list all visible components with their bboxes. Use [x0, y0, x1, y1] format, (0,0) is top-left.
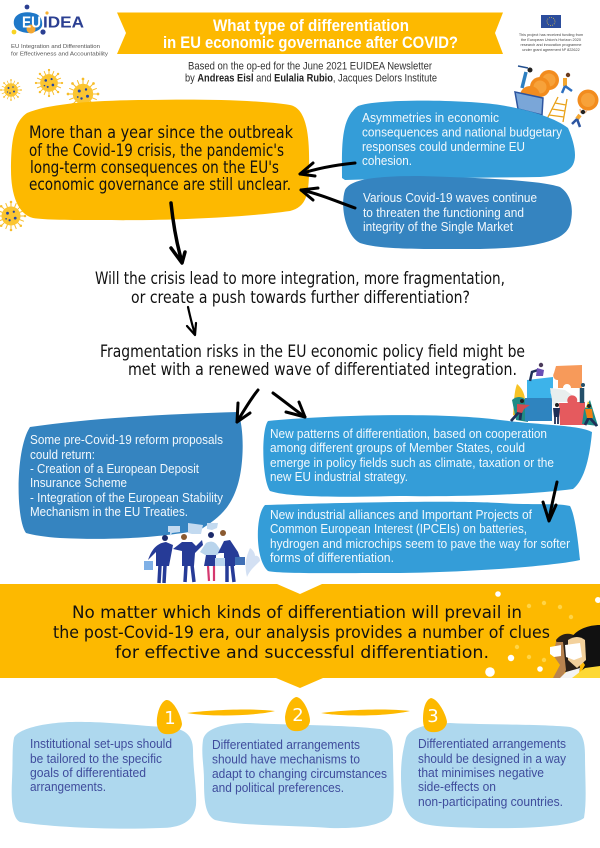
panel: recommendation 3: should be designed in a way [418, 751, 566, 766]
panel: asymmetries [342, 101, 575, 180]
panel: recommendation 1 [12, 722, 196, 829]
panel: new patterns [263, 415, 592, 497]
panel: pre-Covid proposals: - Integration of the European Stability [30, 490, 223, 505]
illustration: coins, basket and ladder [515, 66, 598, 127]
panel: recommendation 1: arrangements. [30, 779, 106, 794]
logo: EUIDEA: EU Integration and Differentiation [11, 44, 100, 50]
illustration: puzzle pieces [511, 363, 598, 426]
panel: recommendation 3: that minimises negative [418, 765, 544, 780]
number 3 badge: 3 [427, 706, 439, 727]
fragmentation text: met with a renewed wave of differentiated integration. [128, 360, 517, 379]
panel: recommendation 3: side-effects on [418, 779, 496, 794]
illustration: business people [144, 523, 260, 583]
fragmentation text [100, 342, 525, 379]
number 3 badge [423, 698, 447, 732]
panel: pre-Covid proposals: Some pre-Covid-19 reform proposals [30, 432, 223, 447]
question text: Will the crisis lead to more integration, more fragmentation, [95, 269, 505, 288]
number 2 badge [285, 697, 310, 731]
panel: recommendation 3 [401, 723, 586, 828]
EU funding notice: This project has received funding from [519, 33, 583, 37]
logo: EUIDEA: IDEA [43, 14, 84, 32]
EU funding notice: under grant agreement Nº 822622 [522, 48, 580, 52]
panel: asymmetries: consequences and national budgetary [362, 124, 562, 140]
arrow: question to fragmentation [187, 307, 196, 335]
logo: EUIDEA [11, 5, 108, 58]
logo: EUIDEA: EU [22, 14, 41, 32]
panel: industrial alliances: Common European Interest (IPCEIs) on batteries, [270, 521, 527, 536]
panel: recommendation 2: Differentiated arrangements [212, 737, 360, 752]
arrow: intro to question [171, 203, 185, 263]
panel: new patterns: among different groups of Member States, could [270, 440, 525, 455]
number 1 badge: 1 [164, 708, 176, 729]
title banner: in EU economic governance after COVID? [163, 33, 458, 52]
panel: industrial alliances [258, 502, 580, 573]
panel: yellow intro blob: long-term consequences on the EU's [30, 158, 279, 177]
panel: industrial alliances: New industrial alliances and Important Projects of [270, 507, 532, 522]
panel: new patterns: emerge in policy fields such as climate, taxation or the [270, 455, 554, 470]
title banner: What type of differentiation [213, 16, 409, 35]
panel: industrial alliances: forms of differentiation. [270, 550, 394, 565]
EU funding notice: the European Union's Horizon 2020 [521, 38, 581, 42]
arrow: new patterns to alliances [543, 482, 557, 521]
virus icons [0, 69, 119, 231]
panel: recommendation 2 [202, 723, 394, 828]
panel: covid waves: to threaten the functioning and [363, 205, 524, 220]
panel: covid waves [343, 176, 572, 249]
number 2 badge: 2 [292, 705, 304, 726]
panel: recommendation 1: Institutional set-ups should [30, 736, 172, 751]
arrow: asymmetries to intro [300, 163, 355, 176]
panel: new patterns: new EU industrial strategy. [270, 469, 408, 484]
panel: recommendation 1: goals of differentiated [30, 765, 146, 780]
panel: recommendation 2: and political preferences. [212, 780, 344, 795]
panel: recommendation 2: adapt to changing circumstances [212, 766, 387, 781]
connector line [187, 710, 275, 715]
EU funding notice: research and innovation programme [520, 43, 582, 47]
panel: asymmetries: Asymmetries in economic [362, 110, 499, 125]
panel: pre-Covid proposals: - Creation of a European Deposit [30, 461, 199, 476]
panel: covid waves: Various Covid-19 waves continue [363, 190, 537, 205]
fragmentation text: Fragmentation risks in the EU economic policy field might be [100, 342, 525, 361]
subtitle [185, 60, 437, 84]
panel: yellow conclusion band: for effective and successful differentiation. [115, 643, 489, 662]
panel: yellow intro blob: economic governance are still unclear. [29, 175, 291, 194]
panel: new patterns: New patterns of differentiation, based on cooperation [270, 426, 547, 441]
number 1 badge [157, 700, 182, 734]
panel: yellow intro blob: of the Covid-19 crisis, the pandemic's [29, 141, 284, 160]
arrow: right branch [273, 393, 305, 417]
question text: or create a push towards further differentiation? [131, 288, 470, 307]
panel: pre-Covid proposals: Mechanism in the EU Treaties. [30, 504, 188, 519]
subtitle: Based on the op-ed for the June 2021 EUIDEA Newsletter [188, 60, 432, 72]
panel: asymmetries: cohesion. [362, 153, 412, 168]
panel: recommendation 3: non-participating countries. [418, 794, 563, 809]
panel: yellow conclusion band [0, 584, 600, 688]
panel: industrial alliances: hydrogen and microchips seem to pave the way for softer [270, 536, 571, 551]
logo: EUIDEA: for Effectiveness and Accountability [11, 52, 108, 58]
title banner [117, 12, 503, 54]
panel: recommendation 2: should have mechanisms to [212, 752, 360, 766]
question text [95, 269, 505, 307]
EU funding notice [519, 15, 583, 52]
panel: recommendation 1: be tailored to the specific [30, 751, 162, 766]
panel: yellow conclusion band: No matter which kinds of differentiation will prevail in [72, 603, 522, 622]
panel: asymmetries: responses could undermine EU [362, 139, 525, 154]
panel: pre-Covid proposals: Insurance Scheme [30, 475, 127, 490]
illustration: masked women and sparkles [485, 591, 600, 678]
panel: yellow intro blob: More than a year since the outbreak [29, 123, 293, 142]
panel: pre-Covid proposals: could return: [30, 447, 95, 462]
arrow: left branch [237, 390, 258, 422]
subtitle: by Andreas Eisl and Eulalia Rubio, Jacques Delors Institute [185, 72, 437, 84]
panel: pre-Covid proposals [19, 412, 243, 539]
panel: covid waves: integrity of the Single Market [363, 219, 513, 234]
panel: yellow intro blob [11, 100, 309, 220]
arrow: waves to intro [301, 188, 355, 208]
panel: recommendation 3: Differentiated arrangements [418, 736, 566, 751]
connector line [321, 710, 410, 715]
panel: yellow conclusion band: the post-Covid-19 era, our analysis provides a number of clues [53, 623, 550, 642]
